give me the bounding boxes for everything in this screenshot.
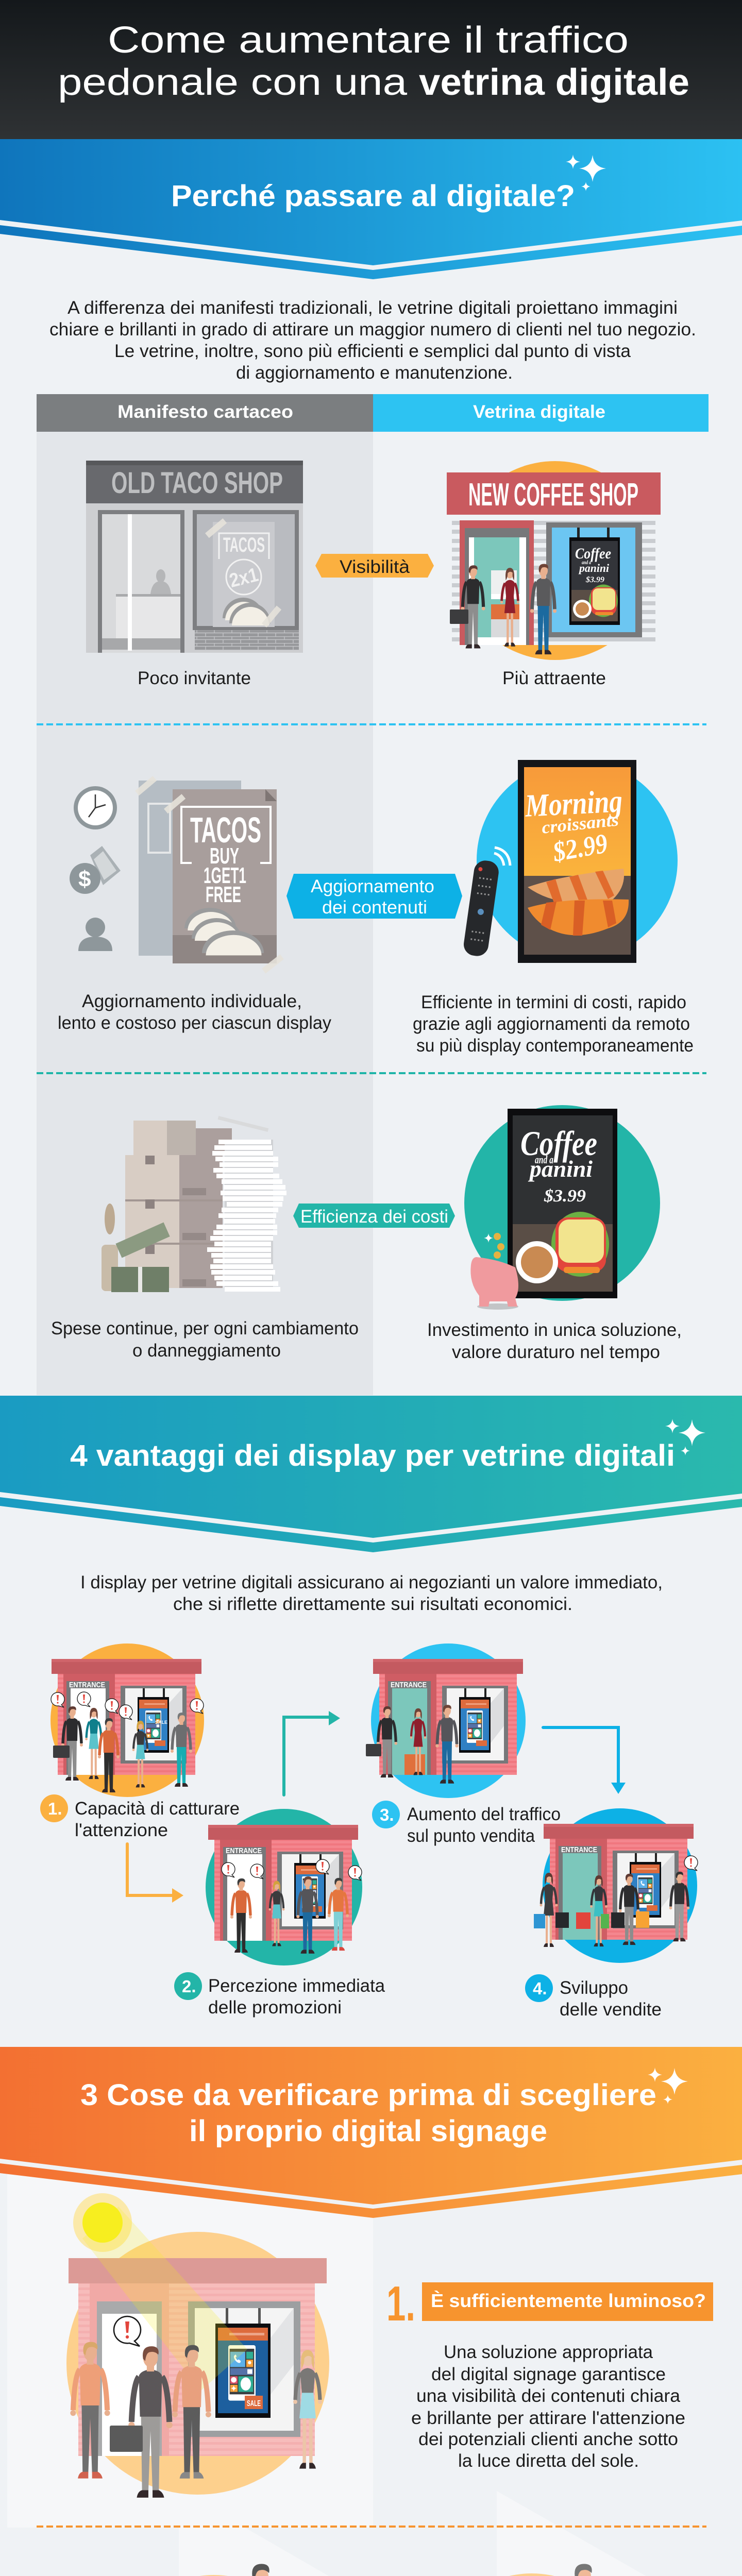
callout 1 heading: 1. xyxy=(386,2276,415,2331)
section banner: 4 vantaggi: 4 vantaggi dei display per vetrine digitali xyxy=(70,1439,675,1472)
captions row 2: grazie agli aggiornamenti da remoto xyxy=(413,1014,690,1034)
illustration: display with remote: $2.99 xyxy=(550,827,610,868)
illustration: old taco shop: TACOS xyxy=(223,534,265,556)
step 1 store xyxy=(50,1643,204,1797)
illustration: display with remote xyxy=(462,760,678,963)
step 3 store xyxy=(366,1643,526,1798)
step 2 label: Percezione immediata xyxy=(208,1976,385,1996)
display: coffee and a panini: $3.99 xyxy=(585,575,604,584)
section 3 light background shapes xyxy=(7,2164,700,2576)
tag: Efficienza dei costi: Efficienza dei costi xyxy=(300,1207,448,1227)
comparison header: Manifesto cartaceo xyxy=(117,402,293,422)
step 4 label: Sviluppo xyxy=(560,1978,628,1998)
display: coffee and a panini xyxy=(569,537,620,625)
step 2 label: delle promozioni xyxy=(208,1997,342,2018)
section banner: 3 cose: il proprio digital signage xyxy=(189,2114,547,2148)
callout 1 heading: È sufficientemente luminoso? xyxy=(431,2290,706,2311)
display: coffee and a panini: Coffee xyxy=(575,545,611,562)
intro paragraph: Le vetrine, inoltre, sono più efficienti e semplici dal punto di vista xyxy=(114,341,631,361)
step 2 store: ENTRANCE xyxy=(226,1846,262,1855)
arrow: step 2 to 3 xyxy=(284,1711,340,1795)
callout 1 text: del digital signage garantisce xyxy=(431,2364,666,2384)
captions row 3: Investimento in unica soluzione, xyxy=(427,1320,682,1340)
intro paragraph: chiare e brillanti in grado di attirare un maggior numero di clienti nel tuo negozio. xyxy=(49,319,696,340)
tag: Aggiornamento dei contenuti: dei contenuti xyxy=(322,897,427,918)
callout 1 text: Una soluzione appropriata xyxy=(444,2342,653,2362)
caption: Poco invitante: Poco invitante xyxy=(138,668,251,688)
step 4 store: ENTRANCE xyxy=(561,1845,597,1854)
illustration: display and piggy bank: $3.99 xyxy=(544,1187,586,1206)
tag: Aggiornamento dei contenuti: Aggiornamento xyxy=(311,876,434,896)
step 3 label: sul punto vendita xyxy=(407,1826,535,1846)
illustration: display and piggy bank xyxy=(464,1105,660,1310)
intro paragraph: vantaggi: I display per vetrine digitali assicurano ai negozianti un valore immediato, xyxy=(80,1572,663,1592)
captions row 3: o danneggiamento xyxy=(132,1341,281,1361)
icons: time, money, person: $ xyxy=(78,867,91,892)
step 1 store: SALE xyxy=(155,1720,167,1725)
comparison header: Vetrina digitale xyxy=(473,402,605,422)
captions row 2: su più display contemporaneamente xyxy=(416,1036,694,1056)
illustration: paper posters: 1GET1 xyxy=(204,863,246,888)
callout 1 heading xyxy=(386,2276,713,2331)
tag: Visibilità xyxy=(315,554,434,578)
captions row 2: Aggiornamento individuale, xyxy=(82,991,302,1011)
step 4 label xyxy=(525,1974,662,2020)
comparison header xyxy=(37,394,709,432)
step 2 label: 2. xyxy=(182,1977,196,1996)
section banner: 3 cose xyxy=(0,2047,742,2218)
arrow: step 3 to 4 xyxy=(543,1727,626,1794)
step 1 label: Capacità di catturare xyxy=(75,1799,240,1819)
captions row 2: Efficiente in termini di costi, rapido xyxy=(421,992,686,1012)
illustration: display and piggy bank: Coffee xyxy=(520,1124,597,1163)
step 2 label xyxy=(174,1972,385,2018)
intro paragraph xyxy=(49,298,696,383)
icons: time, money, person xyxy=(70,786,121,951)
captions row 3: Spese continue, per ogni cambiamento xyxy=(51,1318,359,1338)
tag: Aggiornamento dei contenuti xyxy=(286,874,462,919)
display: coffee and a panini: and a xyxy=(582,560,591,566)
intro paragraph: vantaggi: che si riflette direttamente sui risultati economici. xyxy=(173,1594,572,1614)
header: title: Come aumentare il traffico xyxy=(108,20,629,61)
callout 1 text: e brillante per attirare l'attenzione xyxy=(411,2408,685,2428)
illustration: display and piggy bank: panini xyxy=(528,1156,593,1182)
section banner: Perché passare al digitale xyxy=(0,139,742,279)
captions row 3 xyxy=(51,1318,682,1362)
step 1 label xyxy=(40,1794,240,1840)
header: title: pedonale con una xyxy=(58,62,408,103)
display: coffee and a panini: panini xyxy=(578,562,610,574)
step 4 label: delle vendite xyxy=(560,1999,662,2020)
section banner: 4 vantaggi xyxy=(0,1396,742,1552)
step 3 label: Aumento del traffico xyxy=(407,1804,561,1824)
callout 1 text: una visibilità dei contenuti chiara xyxy=(416,2386,681,2406)
captions row 2: lento e costoso per ciascun display xyxy=(58,1013,331,1033)
step 1 label: l'attenzione xyxy=(75,1820,168,1840)
illustration: display and piggy bank: and a xyxy=(535,1153,553,1166)
step 4 store xyxy=(534,1808,698,1963)
captions row 3: valore duraturo nel tempo xyxy=(452,1342,660,1362)
illustration: store under sunlight xyxy=(66,2193,329,2498)
croissants xyxy=(528,869,629,936)
step 1 store: ENTRANCE xyxy=(69,1681,105,1689)
illustration: menu display side xyxy=(509,2564,592,2576)
intro paragraph: vantaggi xyxy=(80,1572,663,1614)
illustration: new coffee shop xyxy=(443,461,665,660)
illustration: store under sunlight: SALE xyxy=(247,2399,261,2408)
illustration: boxes and paper stack xyxy=(102,1116,286,1292)
section banner: Perché passare al digitale: Perché passare al digitale? xyxy=(171,179,575,213)
illustration: old taco shop xyxy=(86,461,303,653)
caption: Più attraente: Più attraente xyxy=(502,668,606,688)
header: title: vetrina digitale xyxy=(419,62,689,103)
step 3 label: 3. xyxy=(380,1805,394,1824)
illustration: display with remote: croissants xyxy=(541,810,619,838)
callout 1 text: la luce diretta del sole. xyxy=(458,2451,639,2471)
header: title xyxy=(0,0,742,139)
intro paragraph: A differenza dei manifesti tradizionali, le vetrine digitali proiettano immagini xyxy=(68,298,678,318)
step 3 store: ENTRANCE xyxy=(391,1681,427,1689)
step 2 store xyxy=(206,1809,362,1965)
illustration: paper posters: FREE xyxy=(206,882,241,907)
illustration: paper posters: TACOS xyxy=(190,810,261,850)
tag: Visibilità: Visibilità xyxy=(340,557,410,577)
illustration: burger display side xyxy=(200,2564,269,2576)
illustration: old taco shop: OLD TACO SHOP xyxy=(111,466,283,500)
arrow: step 1 to 2 xyxy=(127,1844,183,1903)
illustration: display with remote: Morning xyxy=(524,784,623,824)
step 1 label: 1. xyxy=(48,1799,62,1818)
sun and beam xyxy=(73,2193,247,2391)
step 3 label xyxy=(372,1801,561,1846)
illustration: paper posters: BUY xyxy=(210,843,239,869)
callout 1 text: dei potenziali clienti anche sotto xyxy=(418,2429,678,2449)
intro paragraph: di aggiornamento e manutenzione. xyxy=(236,363,513,383)
section banner: 3 cose: 3 Cose da verificare prima di scegliere xyxy=(80,2078,656,2112)
comparison panel: left column background xyxy=(37,432,373,1395)
callout 1 text xyxy=(411,2342,685,2471)
captions row 2 xyxy=(58,991,694,1056)
illustration: paper posters xyxy=(135,776,284,973)
illustration: old taco shop: 2x1 xyxy=(227,564,260,592)
step 4 label: 4. xyxy=(533,1979,547,1998)
